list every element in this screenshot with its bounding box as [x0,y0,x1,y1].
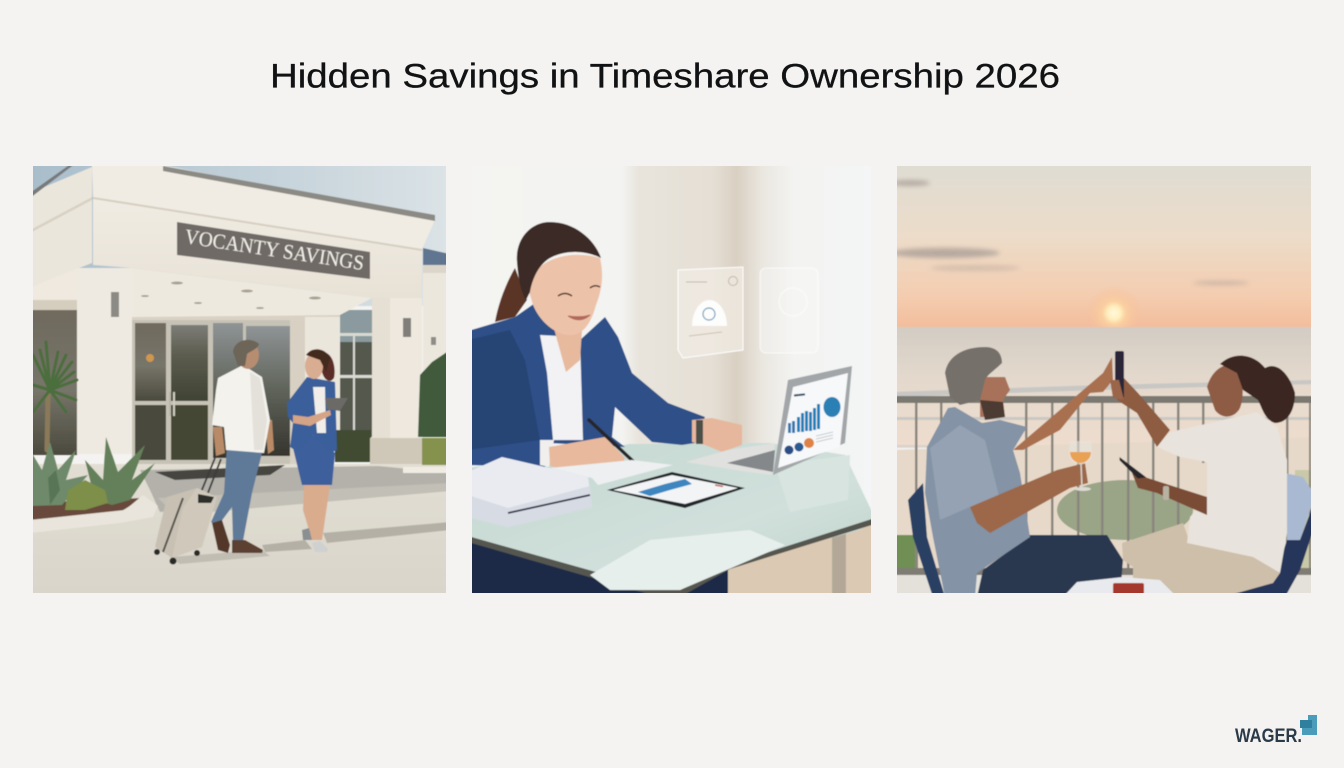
man walking with suitcase [211,340,274,553]
woman with phones [1117,356,1315,597]
right side plants [403,350,450,473]
right wall and window [305,310,372,462]
title: Hidden Savings in Timeshare Ownership 2026 [270,58,1060,96]
panel: advisor at desk photo [472,166,871,593]
balcony railing [893,396,1315,597]
glass table [468,443,875,596]
man with wine glass [908,347,1123,597]
clouds [890,180,1249,285]
pillars [77,268,436,472]
canopy soffit [30,268,372,317]
laptop [686,366,852,475]
curtain background [468,162,875,597]
palm tree [33,342,77,450]
sky [30,163,450,306]
waves [893,380,1315,448]
dune vegetation [893,470,1315,569]
floor and table leg [720,520,875,597]
suitcase [154,458,221,564]
woman in navy blazer [468,222,742,472]
logo icon [1300,715,1317,735]
logo: WAGER [1235,715,1317,747]
sea [893,327,1315,447]
raised phone [1110,351,1124,400]
glass frontage [30,300,372,466]
sign: Vocanty Savings: VOCANTY SAVINGS [183,224,366,275]
wine glass [1069,441,1092,491]
logo wordmark: WAGER. [1235,726,1302,747]
stack of papers [468,457,673,527]
woman with tablet [287,349,348,552]
panel: couple on sunset balcony photo [897,166,1311,593]
right wing of building [423,248,450,385]
side table with red box [1063,577,1177,597]
floating interface card [678,267,743,358]
sunset sky [893,162,1315,328]
faint interface card [760,268,818,353]
beach [893,437,1315,597]
sun [1086,285,1142,341]
navy trousers below table [468,538,728,597]
pavement [30,464,450,596]
canopy fascia [30,163,435,298]
panel: resort entrance photo [33,166,446,593]
tablet [607,472,745,508]
planting bed: agaves and mulch [30,437,158,533]
